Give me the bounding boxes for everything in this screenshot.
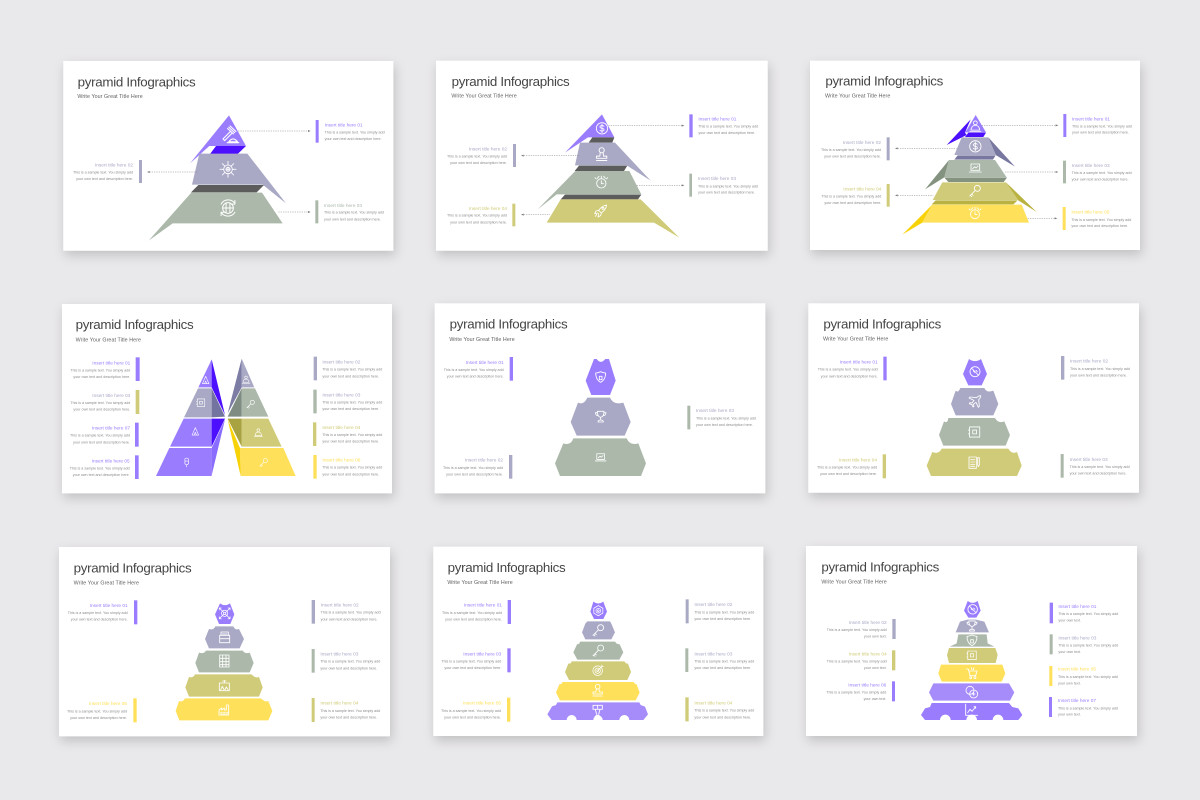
callout 02: your own text and description here.: [321, 617, 378, 621]
callout 02: Insert title here 02: [322, 360, 361, 366]
callout 01: [70, 357, 140, 381]
callout 03: This is a sample text. You simply add: [1070, 465, 1130, 469]
callout 04: Insert title here 04: [849, 651, 887, 657]
callout 05: your own text and description here.: [70, 716, 127, 720]
panel 7: five-tier notched pyramid: Write Your Great Title Here: [74, 580, 139, 586]
callout 02: your own text.: [864, 634, 887, 638]
callout 01: [316, 120, 385, 143]
panel 2: four-level pyramid: [436, 61, 768, 251]
callout 02: your own text and description here.: [824, 154, 881, 158]
callout 02: This is a sample text. You simply add: [827, 628, 887, 632]
panel 7: five-tier notched pyramid: pyramid Infographics: [74, 560, 192, 575]
callout 03: [1061, 454, 1130, 478]
callout 02: Insert title here 02: [843, 140, 881, 146]
callout 03: your own text.: [1058, 650, 1081, 654]
panel 7: five-tier notched pyramid: [59, 547, 390, 736]
callout 02: Insert title here 02: [1070, 359, 1108, 365]
callout 04: Insert title here 04: [320, 701, 359, 707]
panel 8: six-tier notched pyramid: Write Your Great Title Here: [447, 580, 513, 586]
callout 04: your own text and description here.: [824, 201, 881, 205]
callout 03: [1050, 634, 1118, 654]
callout 01: Insert title here 01: [698, 117, 737, 123]
callout 04: your own text and description here.: [694, 715, 751, 719]
callout 03: Insert title here 03: [1058, 635, 1097, 641]
callout 06: your own text.: [864, 697, 886, 701]
callout 03 right: [313, 390, 382, 413]
callout 04: Insert title here 04: [694, 700, 733, 706]
callout 05: Insert title here 05: [1071, 209, 1110, 215]
panel 3: five-level pyramid: pyramid Infographics: [825, 73, 944, 88]
right half pyramid: [228, 359, 296, 476]
callout 04: This is a sample text. You simply add: [694, 709, 754, 713]
panel 4: split double pyramid: [62, 304, 392, 493]
panel 8: six-tier notched pyramid: [433, 547, 763, 736]
callout 03 right: your own text and description here.: [694, 666, 751, 670]
callout 01: This is a sample text. You simply add: [442, 611, 502, 615]
panel 9: seven-tier notched pyramid: pyramid Infographics: [821, 560, 940, 575]
callout 03: Insert title here 03: [324, 203, 362, 209]
callout 02: your own text and description here.: [694, 617, 751, 621]
callout 02: This is a sample text. You simply add: [322, 368, 382, 372]
callout 07: your own text.: [1058, 713, 1081, 717]
callout 01: Insert title here 01: [1072, 116, 1110, 122]
callout 03: Insert title here 03: [696, 408, 734, 414]
pyramid chart: [555, 359, 646, 476]
callout 03 right: This is a sample text. You simply add: [322, 400, 382, 404]
callout 02: Insert title here 02: [321, 602, 359, 608]
callout 01: your own text and description here.: [71, 618, 128, 622]
callout 01: Insert title here 01: [840, 359, 878, 365]
callout 04: your own text and description here.: [322, 440, 379, 444]
callout 03: Insert title here 03: [698, 176, 736, 182]
callout 03: This is a sample text. You simply add: [441, 660, 501, 664]
callout 03: your own text and description here.: [1070, 472, 1127, 476]
panel 9: seven-tier notched pyramid: [806, 546, 1137, 736]
callout 03: Insert title here 03: [463, 651, 502, 657]
callout 05: [441, 698, 510, 722]
callout 02: This is a sample text. You simply add: [821, 148, 881, 152]
callout 07: This is a sample text. You simply add: [1058, 706, 1118, 710]
callout 04: [685, 697, 754, 721]
panel 6: four-tier notched pyramid: Write Your Great Title Here: [823, 337, 888, 343]
panel 5: three-tier notched pyramid: Write Your Great Title Here: [449, 337, 515, 343]
callout 05: your own text and description here.: [444, 716, 501, 720]
callout 03: your own text and description here.: [320, 666, 377, 670]
callout 07: Insert title here 07: [1058, 698, 1096, 704]
callout 01: [444, 357, 513, 381]
callout 03: [441, 648, 511, 672]
callout 02: Insert title here 02: [694, 602, 733, 608]
callout 05: This is a sample text. You simply add: [70, 466, 130, 470]
callout 02: This is a sample text. You simply add: [447, 154, 507, 158]
callout 01: Insert title here 01: [466, 360, 504, 366]
callout 04: Insert title here 04: [469, 206, 507, 212]
callout 03: [70, 390, 139, 414]
callout 04: [817, 454, 886, 478]
callout 04: your own text and description here.: [450, 220, 507, 224]
callout 03: your own text and description here.: [444, 666, 501, 670]
callout 02: your own text and description here.: [450, 161, 507, 165]
callout 03 right: Insert title here 03: [322, 392, 361, 398]
pyramid chart: [521, 114, 684, 238]
panel 2: four-level pyramid: pyramid Infographics: [452, 74, 570, 89]
callout 04: This is a sample text. You simply add: [447, 214, 507, 218]
callout 02: your own text and description here.: [322, 374, 379, 378]
callout 05: your own text and description here.: [73, 473, 130, 477]
callout 01: This is a sample text. You simply add: [1058, 612, 1118, 616]
callout 05: [1049, 666, 1118, 686]
callout 02: [443, 455, 512, 479]
callout 02: This is a sample text. You simply add: [694, 610, 754, 614]
callout 02: Insert title here 02: [95, 163, 133, 169]
callout 04: This is a sample text. You simply add: [821, 195, 881, 199]
callout 04: [447, 204, 515, 226]
callout 02: your own text and description here.: [76, 177, 133, 181]
callout 01: Insert title here 01: [464, 603, 502, 609]
callout 05: your own text.: [1058, 681, 1081, 685]
callout 01: Insert title here 01: [90, 603, 128, 609]
callout 03: Insert title here 03: [1072, 163, 1110, 169]
callout 01: [68, 600, 137, 624]
panel 4: split double pyramid: pyramid Infographics: [76, 317, 194, 332]
callout 01: [1050, 603, 1118, 623]
callout 02: [314, 357, 382, 380]
callout 04: your own text and description here.: [320, 716, 377, 720]
panel 4: split double pyramid: Write Your Great Title Here: [76, 337, 141, 343]
panel 1: three-level pyramid: pyramid Infographics: [78, 74, 196, 89]
callout 08: your own text and description here.: [322, 472, 379, 476]
callout 04: This is a sample text. You simply add: [827, 659, 887, 663]
callout 05: This is a sample text. You simply add: [67, 709, 127, 713]
callout 01: This is a sample text. You simply add: [325, 130, 385, 134]
callout 02: your own text and description here.: [446, 473, 503, 477]
callout 03: your own text and description here.: [324, 217, 381, 221]
callout 03: This is a sample text. You simply add: [1072, 171, 1132, 175]
panel 8: six-tier notched pyramid: pyramid Infographics: [448, 560, 566, 575]
callout 03: [689, 174, 758, 197]
callout 01: Insert title here 01: [325, 122, 363, 128]
callout 03: Insert title here 03: [92, 393, 131, 399]
callout 02: Insert title here 02: [465, 458, 503, 464]
callout 02: Insert title here 02: [849, 620, 887, 626]
callout 01: [1063, 114, 1132, 137]
callout 03: [312, 649, 380, 673]
callout 01: Insert title here 01: [92, 360, 131, 366]
callout 02: [447, 144, 516, 167]
callout 08: This is a sample text. You simply add: [322, 466, 382, 470]
callout 05: This is a sample text. You simply add: [1071, 218, 1131, 222]
callout 03: This is a sample text. You simply add: [696, 416, 756, 420]
callout 04: [313, 422, 382, 446]
callout 01: This is a sample text. You simply add: [1072, 124, 1132, 128]
callout 01: This is a sample text. You simply add: [818, 368, 878, 372]
callout 05: Insert title here 05: [92, 458, 130, 464]
callout 03: This is a sample text. You simply add: [320, 660, 380, 664]
pyramid chart: [147, 115, 311, 241]
callout 08: Insert title here 08: [322, 458, 361, 464]
callout 05: Insert title here 05: [1058, 667, 1096, 673]
callout 08: [313, 455, 382, 479]
callout 05: [67, 698, 137, 722]
callout 03: This is a sample text. You simply add: [1058, 644, 1118, 648]
callout 03: This is a sample text. You simply add: [698, 184, 758, 188]
callout 04: This is a sample text. You simply add: [817, 465, 877, 469]
callout 01: This is a sample text. You simply add: [70, 368, 130, 372]
left half pyramid: [156, 359, 225, 476]
panel 3: five-level pyramid: Write Your Great Title Here: [825, 93, 890, 99]
panel 2: four-level pyramid: Write Your Great Title Here: [451, 94, 517, 100]
callout 02: your own text and description here.: [1070, 374, 1127, 378]
callout 02: [686, 599, 754, 623]
callout 01: This is a sample text. You simply add: [698, 125, 758, 129]
pyramid chart: [921, 601, 1022, 720]
callout 04: Insert title here 04: [839, 457, 877, 463]
callout 03 right: This is a sample text. You simply add: [694, 660, 754, 664]
callout 04: This is a sample text. You simply add: [320, 709, 380, 713]
panel 1: three-level pyramid: Write Your Great Title Here: [77, 94, 143, 100]
panel 6: four-tier notched pyramid: [808, 303, 1139, 493]
callout 02: [827, 619, 896, 639]
panel 1: three-level pyramid: [63, 61, 393, 251]
callout 05: [70, 455, 139, 479]
callout 04: your own text and description here.: [820, 472, 877, 476]
callout 02: This is a sample text. You simply add: [321, 611, 381, 615]
callout 02: This is a sample text. You simply add: [443, 466, 503, 470]
callout 07: your own text and description here.: [73, 440, 130, 444]
callout 03: This is a sample text. You simply add: [70, 401, 130, 405]
callout 05: your own text and description here.: [1071, 224, 1128, 228]
panel 3: five-level pyramid: [810, 61, 1140, 250]
panel 5: three-tier notched pyramid: pyramid Infographics: [450, 317, 568, 332]
callout 01: your own text.: [1058, 619, 1081, 623]
panel 6: four-tier notched pyramid: pyramid Infographics: [823, 316, 942, 331]
callout 05: This is a sample text. You simply add: [441, 709, 501, 713]
callout 02: This is a sample text. You simply add: [73, 171, 133, 175]
callout 01: [689, 114, 758, 137]
callout 03: [315, 200, 384, 223]
callout 03: your own text and description here.: [696, 423, 753, 427]
callout 03: Insert title here 03: [1070, 457, 1108, 463]
callout 02: [73, 160, 142, 183]
callout 04: Insert title here 04: [843, 186, 882, 192]
callout 04: This is a sample text. You simply add: [322, 433, 382, 437]
callout 05: This is a sample text. You simply add: [1058, 675, 1118, 679]
callout 01: your own text and description here.: [73, 375, 130, 379]
callout 07: This is a sample text. You simply add: [70, 434, 130, 438]
callout 07: Insert title here 07: [92, 426, 130, 432]
callout 04: [821, 184, 890, 207]
callout 06: This is a sample text. You simply add: [826, 690, 886, 694]
panel 9: seven-tier notched pyramid: Write Your Great Title Here: [821, 579, 887, 585]
callout 03: [687, 406, 756, 429]
callout 03 right: your own text and description here.: [322, 407, 379, 411]
callout 03: your own text and description here.: [1072, 177, 1129, 181]
callout 01: This is a sample text. You simply add: [68, 611, 128, 615]
callout 05: Insert title here 05: [463, 701, 501, 707]
callout 01: This is a sample text. You simply add: [444, 368, 504, 372]
callout 01: Insert title here 01: [1058, 604, 1097, 610]
callout 02: This is a sample text. You simply add: [1070, 367, 1130, 371]
callout 03: [1063, 161, 1132, 183]
callout 04: Insert title here 04: [322, 425, 361, 431]
callout 06: [826, 681, 895, 701]
callout 07: [70, 423, 139, 447]
callout 01: your own text and description here.: [325, 137, 382, 141]
callout 05: Insert title here 05: [89, 701, 127, 707]
pyramid chart: [895, 115, 1058, 235]
callout 03 right: Insert title here 03: [694, 651, 733, 657]
callout 03 right: [685, 648, 754, 672]
callout 03: Insert title here 03: [320, 651, 359, 657]
callout 01: [442, 600, 511, 624]
callout 03: your own text and description here.: [73, 408, 130, 412]
callout 02: [1061, 356, 1130, 380]
callout 04: your own text.: [864, 666, 887, 670]
callout 01: your own text and description here.: [698, 131, 755, 135]
callout 07: [1049, 697, 1118, 717]
panel 5: three-tier notched pyramid: [435, 303, 765, 493]
pyramid chart: [176, 603, 272, 720]
callout 03: This is a sample text. You simply add: [324, 211, 384, 215]
callout 03: your own text and description here.: [698, 190, 755, 194]
callout 06: Insert title here 06: [848, 682, 887, 688]
pyramid chart: [547, 602, 648, 720]
callout 01: your own text and description here.: [445, 618, 502, 622]
callout 01: your own text and description here.: [1072, 131, 1129, 135]
callout 02: [312, 600, 381, 624]
callout 04: [312, 698, 380, 722]
callout 02: [821, 137, 890, 160]
callout 05: [1063, 207, 1131, 230]
callout 04: [827, 650, 895, 670]
callout 02: Insert title here 02: [469, 147, 507, 153]
callout 01: your own text and description here.: [821, 374, 878, 378]
callout 01: your own text and description here.: [447, 375, 504, 379]
pyramid chart: [927, 359, 1022, 476]
callout 01: [818, 357, 887, 380]
